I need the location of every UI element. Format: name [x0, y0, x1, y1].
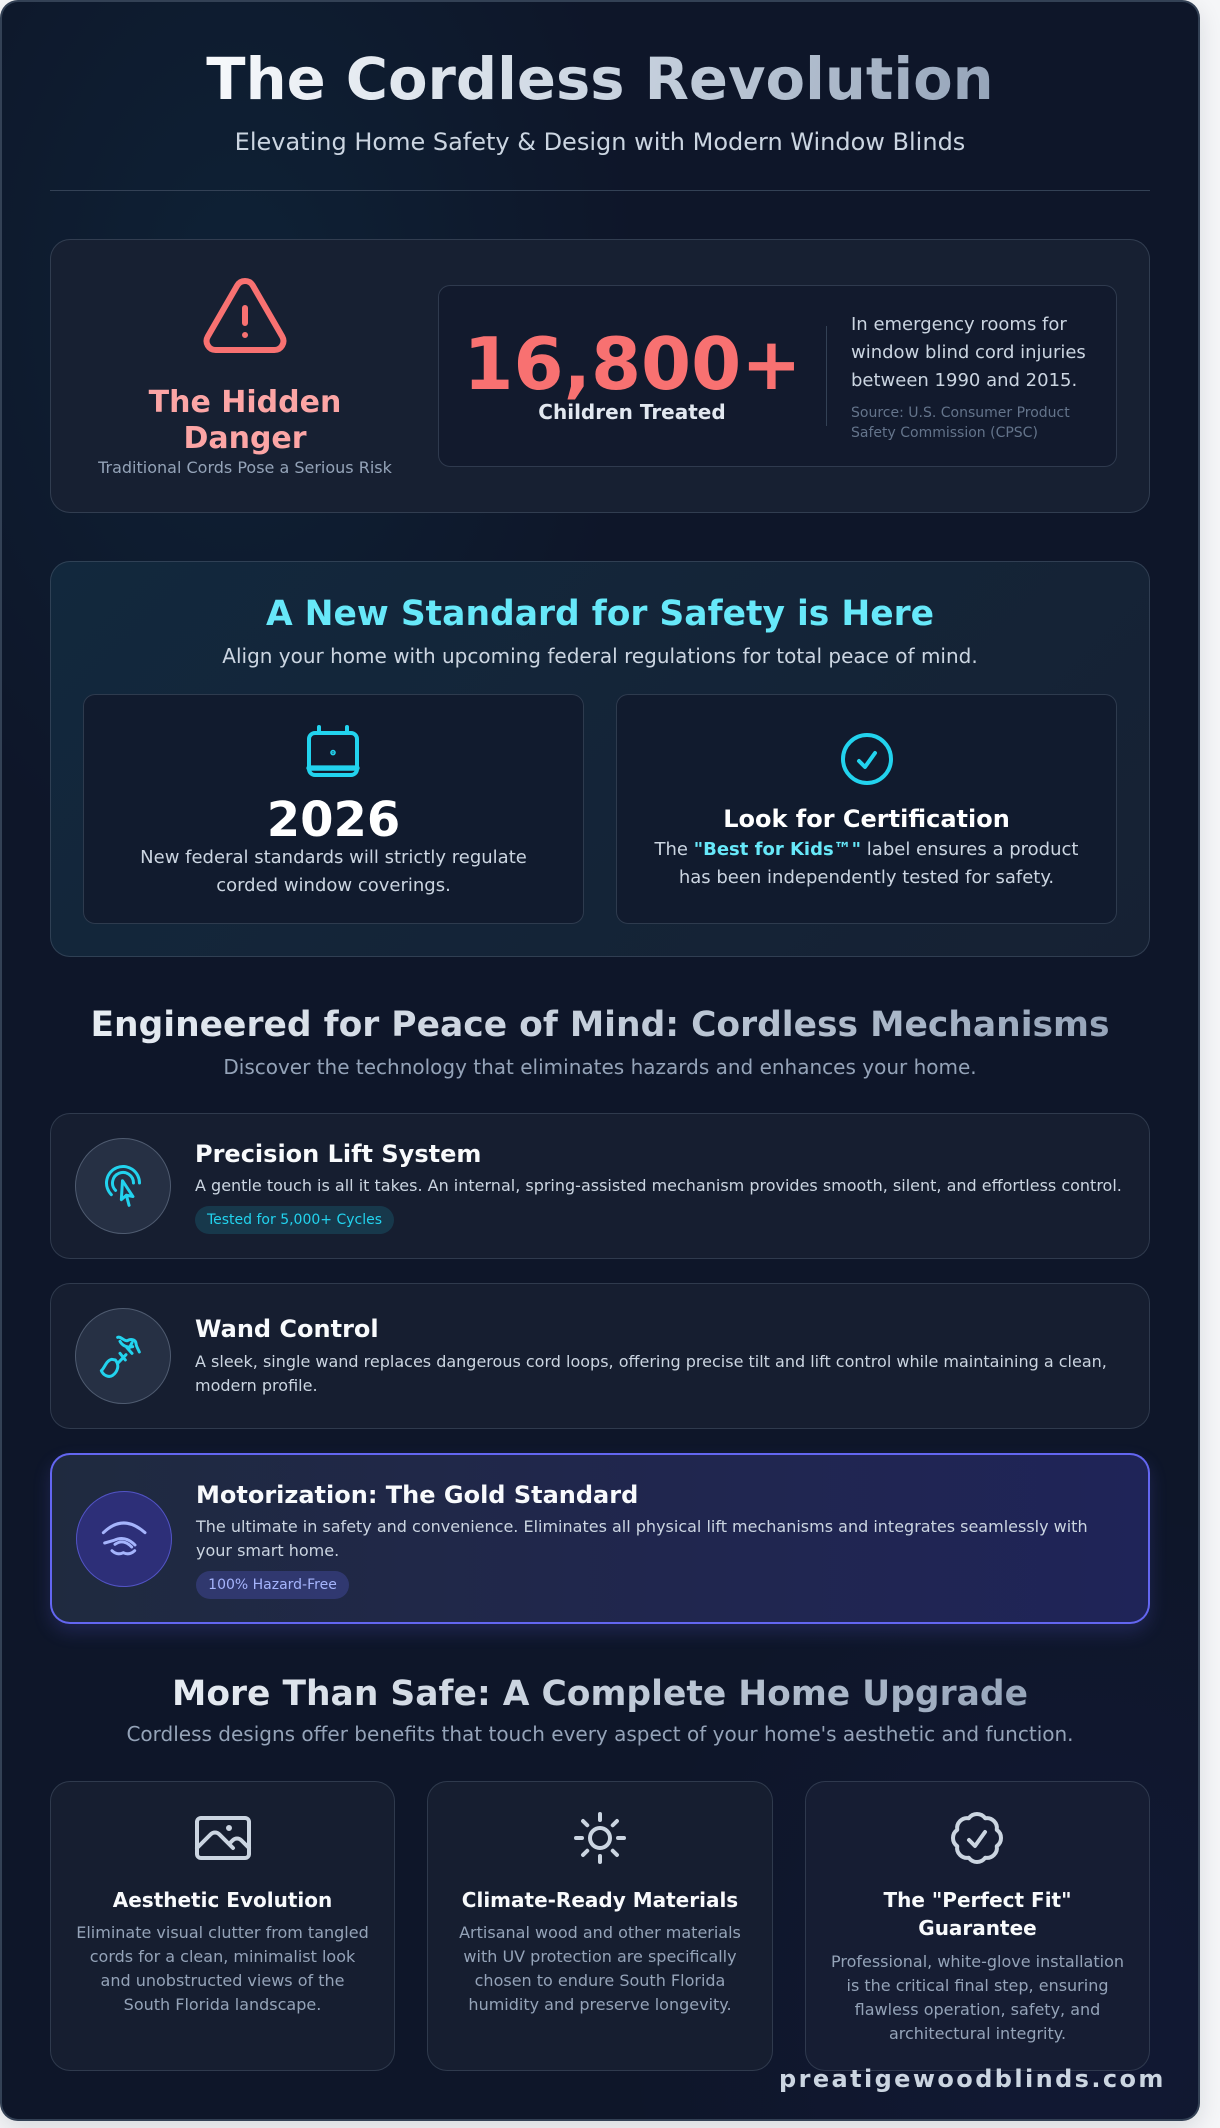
- source: [851, 405, 1070, 441]
- website watermark: preatigewoodblinds.com: [779, 2065, 1166, 2093]
- stat number: 16,800+: [463, 322, 802, 406]
- text: perfect fit: Professional, white-glove installation: [831, 1952, 1124, 1971]
- text: discover the technology: Discover the technology that eliminates hazards and enhances your home.: [223, 1055, 977, 1079]
- icon: calendar: [306, 725, 360, 777]
- tag: tested cycles: [195, 1206, 394, 1234]
- text: perfect fit: flawless operation, safety, and: [855, 2000, 1100, 2019]
- text: best for kids: has been independently tested for safety.: [679, 866, 1054, 888]
- stat description: In emergency rooms for: [851, 314, 1067, 335]
- tag: tested cycles: Tested for 5,000+ Cycles: [207, 1212, 382, 1228]
- heading: precision lift: Precision Lift System: [195, 1140, 481, 1168]
- text: motorization: [196, 1517, 1088, 1560]
- heading: perfect fit: Guarantee: [918, 1916, 1037, 1940]
- card: 2026: [83, 694, 584, 924]
- text: climate-ready: [459, 1923, 741, 2014]
- icon: sun: [574, 1812, 626, 1864]
- text: best for kids: The "Best for Kids™" label ensures a product: [655, 838, 1078, 860]
- text: federal standards: New federal standards will strictly regulate: [140, 846, 527, 868]
- stat description: [851, 314, 1086, 391]
- text: motorization: your smart home.: [196, 1541, 339, 1560]
- heading: certification: Look for Certification: [723, 805, 1010, 833]
- panel: new standard: [50, 561, 1150, 957]
- tag: hazard free: [196, 1571, 349, 1599]
- card: aesthetic evolution: [50, 1781, 395, 2071]
- heading: more than safe: More Than Safe: A Complete Home Upgrade: [172, 1674, 1028, 1714]
- panel: statistic: [438, 285, 1117, 467]
- icon: wand: [75, 1308, 171, 1404]
- panel: the hidden danger: [50, 239, 1150, 513]
- heading: perfect fit: [883, 1888, 1072, 1940]
- card: wand control: [50, 1283, 1150, 1429]
- heading: perfect fit: The "Perfect Fit": [883, 1888, 1072, 1912]
- year: 2026: [267, 792, 400, 848]
- stat description: window blind cord injuries: [851, 342, 1086, 363]
- heading: aesthetic evolution: Aesthetic Evolution: [113, 1888, 332, 1912]
- text: wand control: modern profile.: [195, 1376, 318, 1395]
- source: Source: U.S. Consumer Product: [851, 405, 1070, 421]
- heading: new standard: A New Standard for Safety is Here: [266, 594, 934, 634]
- icon: check badge: [951, 1812, 1003, 1864]
- title: The Cordless Revolution: [206, 46, 994, 113]
- icon: wifi: [76, 1491, 172, 1587]
- icon: check circle: [841, 733, 893, 785]
- card: certification: [616, 694, 1117, 924]
- text: federal standards: [140, 846, 527, 896]
- text: traditional cords: Traditional Cords Pose a Serious Risk: [98, 458, 392, 477]
- heading: motorization: Motorization: The Gold Standard: [196, 1481, 638, 1509]
- icon: cursor ripple: [75, 1138, 171, 1234]
- icon: warning triangle: [204, 278, 286, 353]
- text: federal standards: corded window coverings.: [216, 874, 451, 896]
- text: cordless designs: Cordless designs offer benefits that touch every aspect of your home's aesthetic and function.: [126, 1722, 1074, 1746]
- card: climate-ready materials: [427, 1781, 773, 2071]
- heading: the hidden danger: [148, 385, 341, 456]
- text: perfect fit: is the critical final step, ensuring: [846, 1976, 1108, 1995]
- text: aesthetic evolution: South Florida landscape.: [124, 1995, 321, 2014]
- heading: the hidden danger: Danger: [183, 421, 307, 456]
- text: aesthetic evolution: Eliminate visual clutter from tangled: [76, 1923, 369, 1942]
- icon: photo: [194, 1816, 252, 1860]
- text: climate-ready: Artisanal wood and other materials: [459, 1923, 741, 1942]
- text: perfect fit: [831, 1952, 1124, 2043]
- subtitle: Elevating Home Safety & Design with Modern Window Blinds: [235, 128, 965, 156]
- heading: engineered for peace of mind: Engineered for Peace of Mind: Cordless Mechanisms: [90, 1005, 1110, 1045]
- card: perfect fit guarantee: [805, 1781, 1150, 2071]
- text: best for kids: [654, 838, 1078, 888]
- text: perfect fit: architectural integrity.: [889, 2024, 1066, 2043]
- heading: climate-ready: Climate-Ready Materials: [462, 1888, 738, 1912]
- text: wand control: A sleek, single wand replaces dangerous cord loops, offering precise tilt and lift control while maintaining a clean,: [195, 1352, 1107, 1371]
- text: aesthetic evolution: [76, 1923, 369, 2014]
- tag: hazard free: 100% Hazard-Free: [208, 1577, 337, 1593]
- text: wand control: [195, 1352, 1107, 1395]
- text: aesthetic evolution: cords for a clean, minimalist look: [90, 1947, 355, 1966]
- text: motorization: The ultimate in safety and convenience. Eliminates all physical lift mechanisms and integrates seamlessly with: [196, 1517, 1088, 1536]
- text: climate-ready: with UV protection are specifically: [463, 1947, 737, 1966]
- heading: the hidden danger: The Hidden: [149, 385, 341, 420]
- card: precision lift: [50, 1113, 1150, 1259]
- source: Safety Commission (CPSC): [851, 425, 1038, 441]
- stat label: Children Treated: [538, 400, 726, 424]
- card: motorization: [50, 1453, 1150, 1624]
- text: precision lift: A gentle touch is all it takes. An internal, spring-assisted mechanism provides smooth, silent, and effortless control.: [195, 1176, 1122, 1195]
- heading: wand control: Wand Control: [195, 1315, 379, 1343]
- text: climate-ready: humidity and preserve longevity.: [468, 1995, 732, 2014]
- text: aesthetic evolution: and unobstructed views of the: [101, 1971, 344, 1990]
- stat description: between 1990 and 2015.: [851, 370, 1077, 391]
- text: climate-ready: chosen to endure South Florida: [475, 1971, 725, 1990]
- text: align your home: Align your home with upcoming federal regulations for total peace of mind.: [222, 644, 978, 668]
